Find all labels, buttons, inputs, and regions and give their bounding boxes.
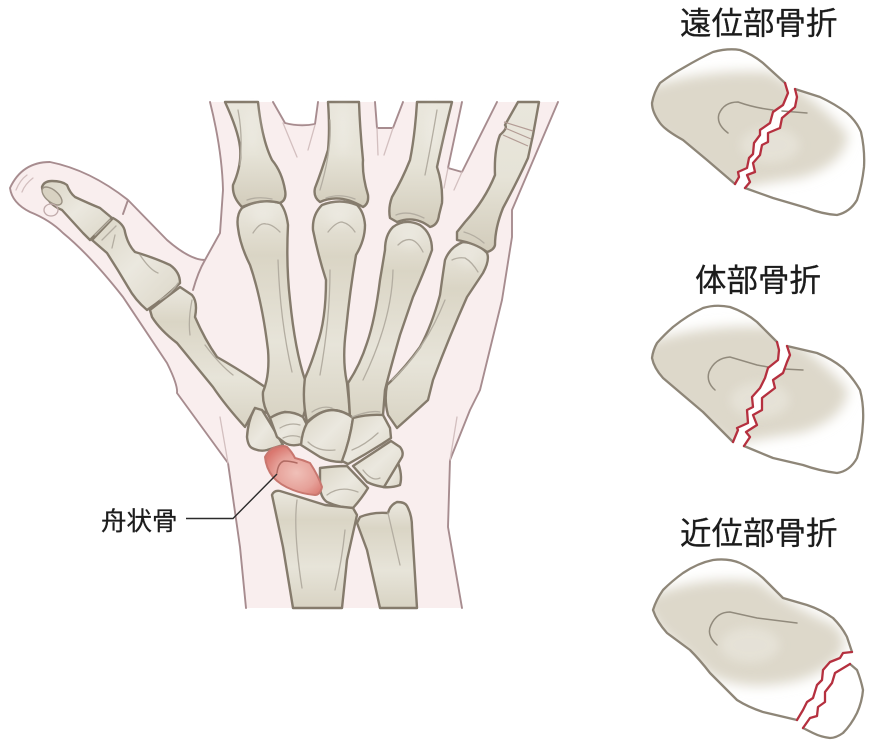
bone shading [640, 326, 848, 445]
capitate [301, 410, 353, 462]
panel: body fracture [640, 262, 863, 473]
pisiform [383, 460, 401, 487]
radius [272, 491, 357, 608]
heading: 遠位部骨折 [680, 5, 838, 41]
middle metacarpal [304, 202, 365, 422]
thumb distal phalanx [42, 181, 112, 240]
forearm inner lines [296, 500, 400, 590]
triquetrum [353, 441, 403, 487]
bone outline [653, 559, 863, 738]
little metacarpal [386, 242, 488, 428]
skin silhouette [10, 102, 558, 608]
callout leader line [186, 474, 277, 518]
thumb joint lines [95, 220, 233, 375]
little finger joint lines [503, 122, 533, 146]
heading: 体部骨折 [695, 262, 821, 298]
middle proximal phalanx [315, 102, 368, 207]
index proximal phalanx [225, 102, 285, 207]
ulna [357, 502, 417, 608]
bone inner lines [238, 110, 484, 380]
bone highlights [246, 106, 476, 266]
bone shading [640, 71, 848, 190]
hand illustration [10, 102, 558, 608]
little proximal phalanx [457, 102, 539, 252]
carpal inner lines [280, 407, 380, 495]
callout: scaphoid label [101, 474, 277, 536]
ring metacarpal [348, 222, 432, 418]
bone shading [640, 580, 844, 686]
thumb nail [39, 184, 65, 216]
skin outline [10, 102, 558, 608]
bone outline [652, 49, 864, 215]
thumb metacarpal [150, 287, 272, 427]
bone ridge line [708, 357, 803, 390]
panel: distal fracture [640, 5, 864, 215]
bone outline [652, 306, 863, 473]
skin folds [16, 123, 462, 463]
trapezoid [270, 412, 307, 445]
fracture line [797, 652, 852, 728]
index metacarpal [238, 201, 307, 418]
trapezium [247, 408, 283, 451]
panel: proximal fracture [640, 515, 863, 738]
bone ridge line [709, 612, 797, 645]
lunate [320, 466, 368, 508]
hamate [342, 415, 391, 464]
callout: scaphoid label: 舟状骨 [101, 508, 178, 536]
thumb proximal phalanx [92, 218, 180, 310]
bone ridge line [718, 102, 807, 133]
fracture line [735, 83, 797, 188]
scaphoid (highlighted) [265, 446, 322, 495]
fracture line [733, 342, 790, 446]
heading: 近位部骨折 [680, 515, 838, 551]
ring proximal phalanx [389, 102, 452, 227]
